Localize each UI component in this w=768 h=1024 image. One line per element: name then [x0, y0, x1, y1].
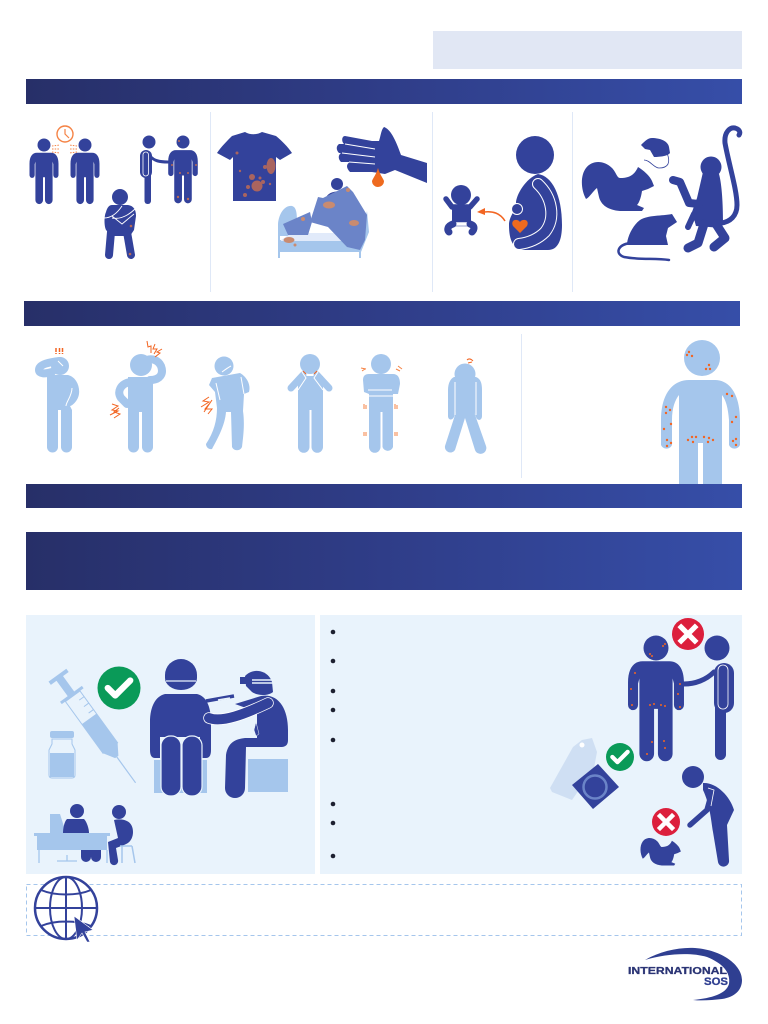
panel: animals — [582, 128, 740, 260]
panel: person to person contact — [30, 126, 198, 255]
icon: small squirrel — [640, 838, 681, 865]
icon: globe with cursor — [35, 877, 97, 942]
panel: symptoms figures — [39, 340, 740, 484]
logo: International SOS: SOS — [704, 976, 728, 988]
icon: stained t-shirt — [217, 132, 292, 201]
logo: International SOS: INTERNATIONAL — [628, 965, 728, 977]
panel: contaminated items — [217, 127, 427, 258]
icon: person receiving vaccine — [150, 659, 211, 796]
icon: syringe — [46, 667, 147, 791]
dashed link box — [26, 884, 742, 936]
icon: condom — [550, 738, 619, 809]
icon: chills person — [361, 354, 402, 453]
icon: fatigue person — [445, 359, 486, 454]
panel: prevention advice — [320, 615, 742, 874]
icon: squirrel — [582, 162, 654, 211]
icon: green check — [98, 666, 140, 710]
icon: headache person — [39, 348, 79, 452]
icon: person bending to animal — [682, 766, 734, 867]
bullet list markers — [331, 630, 335, 858]
icon: red cross — [672, 618, 704, 650]
icon: blood-stained bed — [278, 178, 369, 258]
icon: large rat — [618, 214, 677, 260]
icon: person with rash — [661, 340, 740, 484]
icon: vaccine vial — [49, 731, 75, 778]
top right title box — [433, 31, 742, 69]
logo: International SOS — [628, 948, 742, 1000]
icon: sore throat person — [291, 354, 329, 453]
icon: green check small — [606, 743, 634, 771]
panel: mother to child — [446, 136, 562, 250]
arrow: mother to baby — [477, 208, 505, 221]
icon: doctor giving injection — [206, 671, 288, 798]
icon: avoid contact with infected person — [628, 636, 734, 761]
icon: body ache person — [201, 356, 250, 450]
icon: red cross small — [652, 808, 680, 836]
icon: doctor consultation at desk — [34, 804, 135, 865]
section bar: symptoms — [24, 301, 740, 326]
icon: baby — [446, 185, 477, 232]
section bar: transmission — [26, 79, 742, 104]
section bar: treatment — [26, 484, 742, 508]
section banner: prevention — [26, 532, 742, 590]
icon: small rat — [641, 138, 670, 168]
icon: two people breathing droplets — [30, 126, 100, 204]
icon: monkey — [673, 128, 740, 248]
icon: two people hugging — [104, 189, 136, 255]
panel: vaccination and consultation — [26, 615, 315, 874]
icon: pregnant woman — [509, 136, 562, 250]
icon: hand dripping blood — [337, 127, 427, 187]
icon: person touching infected person — [140, 136, 198, 204]
icon: pain person — [110, 341, 162, 452]
